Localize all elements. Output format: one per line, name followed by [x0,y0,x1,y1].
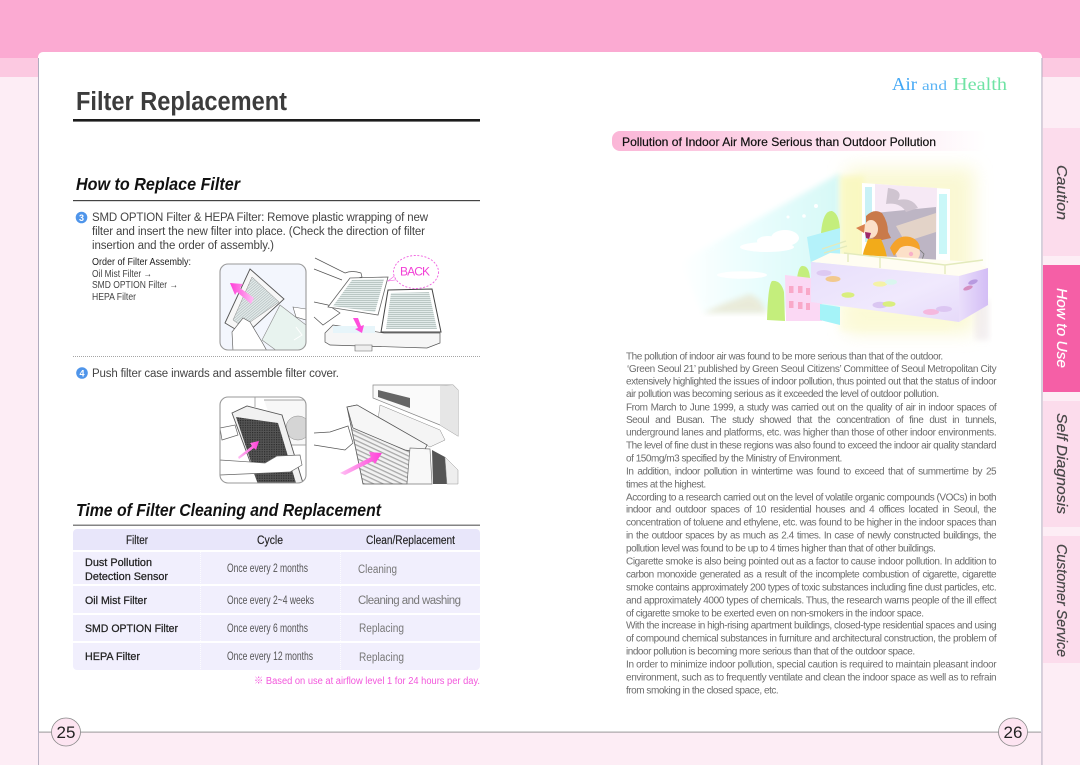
divider [73,356,480,358]
article text: Cigarette smoke is also being pointed out as a factor to cause indoor pollution. In addition to [626,556,997,568]
row: dust sensor: Dust Pollution [85,557,152,569]
arrow: push inwards [238,441,259,459]
row: dust sensor: Detection Sensor [85,571,168,583]
page number 26: 26 [1004,723,1022,742]
step 4 instructions: Push filter case inwards and assemble filter cover. [92,368,339,380]
order of filter assembly: HEPA Filter [92,292,137,303]
article text: In addition, indoor pollution in wintertime was found to exceed that of summertime by 25 [626,466,997,478]
table header: Clean/Replacement [366,535,456,547]
buildings and trees [767,211,840,325]
article text: The level of fine dust in these regions was also found to exceed the indoor air quality standard [626,440,996,452]
illustration: balcony with mother and child [680,168,989,340]
side tab: self diagnosis: Self Diagnosis [1053,413,1070,515]
article text: The pollution of indoor air was found to be more serious than that of the outdoor. [626,352,943,362]
page number 25: 25 [57,723,75,742]
table header: Filter [126,535,148,547]
balcony [811,241,988,322]
article text: With the increase in high-rising apartment buildings, closed-type residential spaces and using [626,620,996,632]
article text: from smoking in the closed space, etc. [626,686,778,696]
article text: air pollution was becoming serious as it exceeded the level of outdoor pollution. [626,389,939,400]
order of filter assembly: Oil Mist Filter → [92,269,152,280]
side tab: how to use (active): How to Use [1053,288,1070,368]
section heading: how to replace filter: How to Replace Filter [76,174,241,194]
article text: and approximately 4000 types of chemicals. Thus, the research warns people of the ill effect [626,596,997,606]
article text: of compound chemical substances in furniture and architectural construction, the problem of [626,634,997,644]
order of filter assembly: SMD OPTION Filter → [92,280,178,291]
callout: BACK: BACK [400,264,430,278]
article text: In order to minimize indoor pollution, special caution is required to maintain pleasant indoor [626,660,997,670]
article text: of 150mg/m3 specified by the Ministry of Environment. [626,454,842,464]
row: oil mist filter: Oil Mist Filter [85,595,147,607]
article text: From March to June 1999, a study was carried out on the quality of air in indoor spaces of [626,402,997,414]
banner heading: pollution of indoor air: Pollution of Indoor Air More Serious than Outdoor Pollution [622,135,936,149]
order of filter assembly [92,257,191,303]
arrow: push cover [340,452,382,475]
row: dust sensor: Cleaning [358,564,397,576]
article text: in the outdoor spaces by as much as 2.4 times. In case of newly constructed buildings, the [626,530,997,542]
order of filter assembly: Order of Filter Assembly: [92,257,191,268]
side tab: customer service: Customer Service [1053,544,1070,657]
step 3 instructions [76,212,429,252]
banner heading: pollution of indoor air [612,131,987,151]
article text: extensively highlighted the issues of indoor pollution, thus pointed out that the status of indoor [626,376,997,388]
row: SMD option filter: Replacing [359,623,404,635]
row: dust sensor [73,552,480,584]
side tab: how to use (active) [1043,265,1080,392]
table header: Cycle [257,535,283,547]
illustration: inserting filter with hands [314,256,441,351]
side tab: caution: Caution [1053,165,1070,220]
step 3 instructions: insertion and the order of assembly.) [92,240,274,252]
icon: step number 4: 4 [79,368,85,378]
article text [626,352,997,696]
icon: step number 4 [76,367,88,379]
section label: air and health: Air [892,74,917,94]
mother [856,211,891,258]
illustration: pushing filter case [220,397,310,483]
article text: underground lanes and platforms, etc. was higher than those of other indoor environments. [626,428,996,438]
clouds [717,204,818,279]
title: Filter Replacement [76,88,287,116]
table footnote: ※ Based on use at airflow level 1 for 24 hours per day. [254,676,480,687]
window with smoggy view [862,183,950,266]
arrow: down into case [353,318,364,333]
row: SMD option filter: Once every 6 months [227,621,308,635]
table: filter cycles [73,529,480,670]
article text: pollution level was found to be up to 4 times higher than that of other buildings. [626,544,935,554]
illustration: unwrapping new filter [220,264,306,351]
article text: Seoul and Busan. The study showed that the concentration of fine dust in tunnels, [626,415,996,426]
section label: air and health [892,74,1007,94]
article text: smoke contains approximately 200 types of toxic substances including fine dust particles, etc. [626,582,996,594]
page number 25 [52,718,80,746]
article text: indoor and outdoor spaces of 10 residential houses and 4 offices located in Seoul, the [626,504,997,516]
row: HEPA filter: Once every 12 months [227,649,313,663]
section heading: time of filter cleaning and replacement: Time of Filter Cleaning and Replacement [76,500,382,520]
section label: air and health: and [922,79,947,94]
article text: concentration of toluene and ethylene, etc. was found to be higher in the indoor spaces than [626,518,996,528]
side tab: self diagnosis [1043,401,1080,527]
article text: carbon monoxide generated as a result of the incomplete combustion of cigarette, cigarette [626,570,997,580]
row: HEPA filter: Replacing [359,652,404,664]
child [872,236,924,273]
side tab: caution [1043,128,1080,256]
article text: indoor pollution is becoming more serious than that of the outdoor space. [626,646,915,658]
step 3 instructions: filter and insert the new filter into place. (Check the direction of filter [92,226,425,238]
row: HEPA filter [73,643,480,670]
icon: step number 3: 3 [79,213,84,223]
row: SMD option filter [73,615,480,641]
arrow: lift filter [230,283,254,304]
step 3 instructions: SMD OPTION Filter & HEPA Filter: Remove plastic wrapping of new [92,212,429,224]
row: oil mist filter: Cleaning and washing [358,595,461,607]
row: dust sensor: Once every 2 months [227,561,308,575]
article text: of cigarette smoke to be exerted even on non-smokers in the indoor space. [626,608,924,620]
article text: environment, such as to frequently ventilate and clean the indoor space as well as to refrain [626,672,996,684]
article text: ‘Green Seoul 21’ published by Green Seoul Citizens’ Committee of Seoul Metropolitan City [627,364,997,375]
side tab: customer service [1043,536,1080,663]
section label: air and health: Health [953,74,1007,94]
row: HEPA filter: HEPA Filter [85,651,140,663]
row: oil mist filter [73,586,480,613]
article text: times at the highest. [626,480,706,490]
row: SMD option filter: SMD OPTION Filter [85,623,178,635]
page number 26 [998,718,1028,746]
article text: According to a research carried out on the level of volatile organic compounds (VOCs) in both [626,492,996,504]
icon: step number 3 [76,212,87,223]
row: oil mist filter: Once every 2~4 weeks [227,593,314,607]
illustration: closing filter cover [314,385,458,484]
table header [73,529,480,550]
